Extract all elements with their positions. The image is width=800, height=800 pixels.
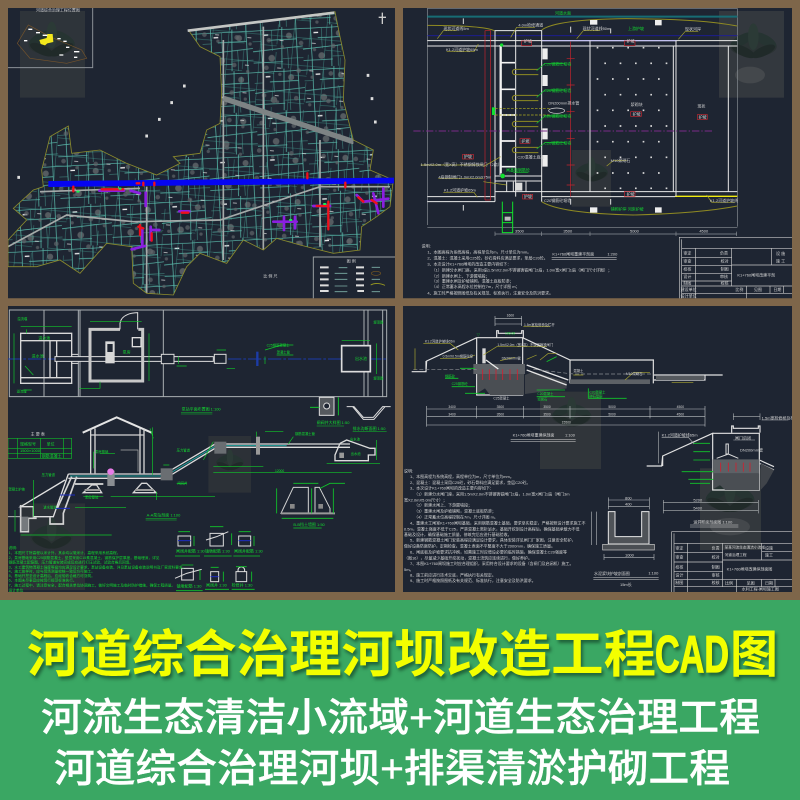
title block: 日期 <box>773 286 781 292</box>
title block: 施 工 <box>776 258 785 264</box>
panel: dam section: 浆砌石 <box>537 397 548 402</box>
green gate <box>492 107 495 115</box>
design notes: 8、施工前应进行技术交底，严格执行有关规定。 <box>410 571 496 577</box>
drawing frame <box>427 8 737 228</box>
panel: pump station section: 溢流堰 <box>17 389 27 394</box>
pump data table: 单位 <box>47 440 55 446</box>
plan annotations: 现状 <box>697 103 705 109</box>
panel: dam section: K1.2河道护坡线65m <box>425 339 455 344</box>
main section title: K1+760闸坝重建纵剖面 <box>513 432 554 438</box>
small details: 闸阀井配筋 1:30 <box>176 548 206 554</box>
plan annotations: 浆砌块 <box>631 101 643 107</box>
design notes: 7、本图K1+760闸坝施工时应合理组织，采用符合设计要求的设备（含闸门及启闭机）施工。 <box>410 560 573 566</box>
plan: pump house <box>90 313 143 381</box>
main section: dimension lines: 3500 <box>497 405 504 409</box>
watermark plant <box>719 11 784 98</box>
second section: 闸门启闭 <box>735 434 751 440</box>
inset location map <box>8 7 93 98</box>
design notes: 宽X2.0mX5.0m尺寸）； <box>404 496 447 502</box>
red label boxes <box>463 41 707 199</box>
retaining wall section <box>277 483 345 528</box>
plan: pier <box>254 352 261 366</box>
compass <box>379 13 386 24</box>
bank curves <box>427 19 737 215</box>
basin block dots <box>597 48 672 188</box>
plan annotations: 护坡 <box>524 193 532 199</box>
design notes: 6、闸底板及护坡要求抗冲刷，如需施工时应增设必要的临时措施，确保混凝土C20强度等 <box>410 548 567 554</box>
plan annotations: M10浆砌石 <box>611 157 630 163</box>
title block <box>672 532 792 592</box>
map: road and water network <box>0 0 400 300</box>
design notes: （3）重建水闸及护坡铺砌，混凝土底板防渗； <box>414 508 496 514</box>
design notes: （图16），尽量减少基础开挖扰动，混凝土浇筑应连续进行，做好养护。 <box>404 554 532 560</box>
title block: 日期 <box>765 579 773 585</box>
plan annotations: 河道水面 <box>555 9 571 15</box>
panel: pump station section: 进水池 <box>38 334 50 340</box>
main title: CAD <box>655 626 729 684</box>
design notes: 2、混凝土：混凝土采用C25砼，砂石骨料应满足要求，垫层C20砼。 <box>427 255 548 261</box>
green design notes: 钢筋混凝土配筋图，压力管道安装完成后应进行打压试验，试验合格后回填。 <box>9 559 133 564</box>
small details: 镇墩配筋 1:30 <box>205 548 231 554</box>
second section: 1.5m宽检修桥及栏杆 <box>762 414 798 420</box>
main section: dimension lines: 3500 <box>543 405 551 409</box>
title block: 设 施 <box>776 250 785 256</box>
second section <box>647 413 798 527</box>
section title: A-A泵站剖面 1:100 <box>147 512 181 518</box>
panel: dam section <box>403 306 798 592</box>
panel: sluice dam plan <box>403 8 792 299</box>
main section title <box>511 432 576 441</box>
panel: pump station section: 进水池 <box>32 352 44 358</box>
title block: 施工 <box>765 552 773 558</box>
main section: leaders <box>415 327 693 383</box>
plan annotations: DN200mm排水管 <box>548 99 579 105</box>
main section: dimension lines: 4500 <box>677 412 684 416</box>
panel: pump station section: 压力管道 <box>42 472 56 477</box>
outlet ladder <box>502 202 513 233</box>
design notes: 9、施工时严格按照图纸及有关规范、标准执行，注意安全及防洪要求。 <box>410 577 536 583</box>
panel: dam section: C25混凝土 <box>493 395 510 400</box>
plan annotations: 4扇钢制闸门1.0mX2.0mX75m <box>438 174 492 180</box>
legend: 图 例 <box>347 258 356 264</box>
panel: pump station section: 12000 <box>275 469 284 473</box>
title block: 见图 <box>754 286 762 292</box>
green design notes <box>9 545 186 592</box>
map: outline <box>8 12 393 295</box>
detail: trapezoid: 排水沟断面图 1:50 <box>353 425 386 431</box>
plan title: 泵站平面布置图 1:100 <box>182 406 221 412</box>
panel: dam section: C20混凝土 <box>537 391 554 396</box>
design notes: 4、重建水工闸室K1+760闸坝基础，采用钢筋混凝土基础，要求坚实稳定，严格按照设计要求施工不 <box>410 519 585 525</box>
design notes: （1）新建分水闸门座，采用1.5mX2.0m不锈钢铸铁闸门2扇，1.0m宽X闸门1扇（闸门3m <box>414 490 570 496</box>
plan annotations: 现状河道线50m <box>583 25 611 31</box>
section title <box>146 512 181 520</box>
second section: K1.2河道护坡线65m <box>662 432 698 438</box>
title block: 河道治理工程 <box>725 552 747 557</box>
design notes: 说明: <box>422 242 431 248</box>
plan: pipe line <box>55 357 213 361</box>
blue axis <box>8 357 387 360</box>
second section: DN200mm管 <box>740 447 763 453</box>
design notes: 5、新建钢筋混凝土闸门安装高程应满足设计要求，具体安装详见闸门厂家图，注意安全防护， <box>410 537 576 543</box>
map: northern road <box>188 13 334 31</box>
main section: dimension lines: 3500 <box>497 412 504 416</box>
dimension line: 3500 <box>515 229 525 234</box>
plan: valve wells <box>161 346 370 372</box>
plan annotations: 现状河道线5m <box>443 25 469 31</box>
design notes: （3）重建水闸及护坡铺砌，混凝土底板防渗； <box>432 277 514 283</box>
title block: 审核 <box>720 273 728 279</box>
main section: dimension lines: 1600 <box>507 314 514 318</box>
title block: 校对 <box>721 257 729 263</box>
basin walls <box>590 41 728 197</box>
map: scattered place labels <box>17 75 377 177</box>
design notes: （2）新建水闸上、下游翼墙段； <box>414 502 472 508</box>
main section: dimension lines: 5000 <box>608 405 616 409</box>
panel: dam section: 0.5mX0.5m钢筋砼梁 <box>443 353 474 358</box>
green design notes: 设计单位 <box>9 587 24 592</box>
green design notes: 7、施工过程中，请注意安全，配合相关单位协调施工，做好文明施工及临时防护措施，确保工程质量。 <box>9 583 175 588</box>
U-channel section: 800 <box>625 495 632 500</box>
detail: well <box>310 397 350 426</box>
panel: dam section: 碎石垫层 <box>589 393 603 398</box>
scale label: 比 例 尺 <box>263 272 278 278</box>
green design notes: 1、本图尺寸除高程以米计外，其余均以毫米计，高程采用系统高程。 <box>9 550 120 555</box>
map: blue main river <box>48 178 394 187</box>
title block: 审定 <box>683 250 691 256</box>
pump data table: 1500×1000 <box>20 448 41 453</box>
dimension line <box>494 230 737 236</box>
green design notes: 3、水工建筑物混凝土强度等级均应满足设计要求，泵站设备安装，详见泵站设备安装说明书及厂家资料要求。 <box>9 564 186 569</box>
design notes <box>422 242 612 296</box>
section: foundation <box>83 483 156 493</box>
small details <box>175 527 264 591</box>
title block: 审核 <box>712 572 720 578</box>
title block: 审定 <box>675 544 683 550</box>
watermark plants <box>20 436 251 590</box>
green design notes: 6、本图未尽事宜应按现行规范标准执行。 <box>9 578 77 583</box>
panel: pump station section: 堤顶路 <box>373 375 384 380</box>
title block: 设施 <box>765 544 773 550</box>
small details: 闸阀井 1:30 <box>206 582 228 588</box>
title block: 比例 <box>735 286 743 292</box>
green design notes: 5、基础开挖至设计高程后，应经验收合格方可浇筑。 <box>9 573 95 578</box>
design notes: （4）正常蓄水高程水位控制在7m，尺寸详图 m； <box>432 283 520 289</box>
panel: dam section: 1.5mX2.0m（宽X高）不锈钢铸铁闸门 <box>497 342 554 347</box>
panel: pump station section: 进水管道 <box>43 504 57 509</box>
section: outlet pool <box>335 440 375 461</box>
legend <box>313 257 395 298</box>
panel: pump station section: 出水池 <box>351 451 361 456</box>
plan annotations: K1.2河道护坡65m <box>444 186 477 192</box>
plan annotations: 1.5mX2.0m（宽X高）不锈钢铸铁闸门（2扇） <box>421 161 502 167</box>
main section: dimension lines: 4500 <box>677 405 684 409</box>
title block: 制图 <box>683 280 691 286</box>
design notes: （4）正常蓄水位高程控制在7m，尺寸详图 m。 <box>414 513 498 519</box>
subtitle line 1: 河流生态清洁小流域+河道生态治理工程 <box>41 697 760 740</box>
U-channel section: 15m长 <box>620 581 632 587</box>
title block: 负责 <box>712 544 720 550</box>
section: pressure pipeline <box>68 437 350 480</box>
plan annotations: 护坡 <box>524 38 532 44</box>
title block: K1+760闸坝改建平剖 <box>737 272 775 278</box>
plan annotations: K1.2河道护坡65m <box>446 46 479 52</box>
main section: dimension lines: 5000 <box>608 412 616 416</box>
design notes: 做好设备防腐防护，定期检查。混凝土表面不平整度不大于2000mm，确保施工质量。 <box>404 543 555 549</box>
banner <box>0 600 800 800</box>
drawing title <box>552 250 618 259</box>
title block: 设计 <box>675 572 683 578</box>
pump data table <box>8 431 72 458</box>
main section: dimension lines <box>427 314 705 427</box>
purple centerline <box>413 130 712 132</box>
title block: 负责 <box>720 250 728 256</box>
green design notes: 4、施工放样时，应与现场测量校核一致后方可施工。 <box>9 569 95 574</box>
title block: 水利工程-闸坝施工图 <box>742 586 779 592</box>
panel: pump station section: 堤顶路 <box>373 319 384 324</box>
plan annotations: 上游护坡 <box>628 25 644 31</box>
main section: dimension lines: 3400 <box>448 412 456 416</box>
design notes: 1、本图高程为系统高程，高程单位为m，尺寸单位为mm。 <box>410 473 514 479</box>
design notes <box>404 468 585 583</box>
green plan dimensions <box>14 322 377 390</box>
panel: pump station section: 出水池 <box>350 437 361 442</box>
green design notes: 2、泵房基础采用C25钢筋混凝土，垫层采用C15素混凝土，钢筋保护层厚度，基础埋深，详见 <box>9 555 160 560</box>
title block: 制图 <box>712 563 720 569</box>
pump data table: 规格型号 <box>20 440 36 446</box>
watermark plant <box>572 150 611 207</box>
yellow pipes <box>495 108 550 115</box>
plan annotations: C20钢筋砼堰墙 <box>544 197 571 203</box>
panel: pump station section: 溢流堰 <box>17 316 28 321</box>
retaining wall section: B-B挡土墙图 1:50 <box>293 521 326 527</box>
title block: 制图 <box>675 579 683 585</box>
design notes: 0.5m，混凝土强度不低于C25，严禁混凝土离析泌水，基础开挖到设计高程后，确保基础承载力不低 <box>404 525 580 531</box>
plan annotations: K1.2河道护坡线 <box>710 197 738 203</box>
panel: dam section: M10浆砌石 <box>626 371 643 376</box>
plan title <box>181 406 221 414</box>
U-channel section <box>592 495 659 587</box>
detail: well: 闸阀井大样图 1:50 <box>317 419 350 425</box>
plan annotations: C20钢筋砼堰墙 <box>544 60 571 66</box>
panel: pump station section: 泵房 <box>123 348 131 354</box>
plan annotations: 铺砌护岸 河床护坡 <box>611 206 644 212</box>
U-channel section: 1000 <box>625 552 635 557</box>
design notes: 2、混凝土：混凝土采用C25砼，砂石骨料应满足要求，垫层C20砼。 <box>410 479 530 485</box>
inset location map: 河道综合治理工程位置图 <box>36 7 80 13</box>
panel: pump station section: C25钢筋混凝土 <box>267 343 290 348</box>
section markers and white boxes <box>542 48 548 167</box>
panel: pump station section: 钢筋混凝土管 <box>295 431 316 436</box>
panel: pump station section: 泵房基础 <box>95 449 109 454</box>
title block: 校核 <box>721 280 729 286</box>
plan annotations: C20钢筋砼堰墙 <box>544 87 571 93</box>
drawing title: 1:200 <box>607 251 618 256</box>
second section: 5200 <box>693 497 703 502</box>
title block: 审查 <box>683 257 691 263</box>
title block: 见图 <box>747 579 755 585</box>
sluice structure <box>495 31 542 202</box>
section: pump house roof <box>83 417 152 473</box>
design notes: 1、本图高程为系统高程，高程单位为m，尺寸单位为mm。 <box>427 249 531 255</box>
section: inlet pool <box>8 474 77 532</box>
teal channel <box>427 16 738 18</box>
small details: 闸阀井配筋 1:30 <box>234 548 264 554</box>
dimension line: 5000 <box>630 229 640 234</box>
plan annotations: 护坡 <box>521 137 529 143</box>
panel: pump station section <box>8 306 395 592</box>
title block: 校对 <box>712 554 720 560</box>
plan: inlet chamber <box>21 333 78 383</box>
second section: 5400 <box>693 505 703 510</box>
main section title: 1:100 <box>565 433 576 438</box>
title block: 校核 <box>675 563 683 569</box>
main title: 河道综合治理河坝改造工程 <box>27 626 656 683</box>
drawing title: K1+760闸坝重建平剖面 <box>552 250 594 256</box>
title block: K1+760闸坝改建纵剖面图 <box>727 566 772 572</box>
panel: river basin map <box>0 0 400 300</box>
plan frame <box>9 310 387 397</box>
watermark plants <box>540 392 761 550</box>
plan annotations: C20钢筋砼堰墙 <box>544 113 571 119</box>
main section: dimension lines: 3500 <box>543 412 551 416</box>
main section: dimension lines: 3400 <box>448 405 456 409</box>
title block: 审查 <box>675 554 683 560</box>
plan annotations: 护坡 <box>627 38 635 44</box>
leader lines <box>421 27 735 202</box>
panel: dam section: 混凝土 <box>573 368 584 373</box>
title block: 校核 <box>683 265 691 271</box>
green design notes: 说明: <box>9 545 17 550</box>
plan annotations <box>421 9 738 212</box>
panel: dam section: C20混凝土 <box>589 389 606 394</box>
design notes: 基础及设计，确保基础施工质量，修筑完后应进行基础验收。 <box>404 531 512 537</box>
panel: dam section: C25钢筋砼 <box>452 381 468 386</box>
subtitle line 2: 河道综合治理河坝+排渠清淤护砌工程 <box>54 748 730 791</box>
red dimensions <box>485 31 571 200</box>
section: pump <box>75 468 115 486</box>
panel: pump station section: 出水池 <box>355 355 367 361</box>
panel: pump station section: 泵房基础 <box>85 494 99 499</box>
design notes: 说明: <box>404 468 413 474</box>
plan annotations: C20钢筋砼堰墙 <box>544 140 571 146</box>
title block: 校核 <box>712 579 720 585</box>
blue axis <box>427 35 738 36</box>
title block: 某某河流生态清洁小流域 <box>725 545 765 550</box>
title block: 设计 <box>683 273 691 279</box>
plan annotations: 4.0m检修通道 <box>518 22 543 28</box>
title block: 建设单位 <box>681 286 697 292</box>
panel: dam section: 106.00 <box>505 332 515 336</box>
panel: pump station section: 混凝土管 <box>277 349 291 354</box>
main section: dimension lines: 15500 <box>562 421 571 425</box>
road lines <box>427 41 737 202</box>
pump data table: 主 要 表 <box>31 431 45 437</box>
title block: 制图 <box>721 265 729 271</box>
small details: 镇墩配筋 1:30 <box>177 582 202 588</box>
plan annotations: 护坡 <box>633 110 641 116</box>
U-channel section: 水泥浆块护坡剖面图 <box>594 570 630 576</box>
yellow slots <box>512 69 538 153</box>
design notes: 3、本次设计K1+760闸坝的改造主要内容如下： <box>427 261 511 267</box>
main section: embankment <box>412 331 723 395</box>
plan annotations: C20混凝土底板 <box>517 154 545 160</box>
design notes: （1）新建分水闸门座，采用3扇1.5mX2.0m不锈钢铸铁闸门2扇，1.0m宽X闸门1扇（闸门尺寸详图）； <box>432 267 612 273</box>
detail: trapezoid <box>347 407 391 432</box>
U-channel section: 1:100 <box>648 571 659 576</box>
title block: 设计单位 <box>681 293 697 299</box>
design notes: （2）新建水闸上、下游翼墙段； <box>432 272 490 278</box>
bridge and road section ticks <box>463 18 611 211</box>
plan annotations: 护坡 <box>464 153 472 159</box>
dimension line: 4500 <box>699 229 709 234</box>
main title: 图 <box>730 626 778 683</box>
map: purple and red works <box>73 173 388 249</box>
panel: pump station section: 闸阀井 <box>177 480 188 485</box>
design notes: 4、施工时严格按照图纸及有关规范、标准执行，注意安全及防洪要求。 <box>427 290 553 296</box>
pump data table: 钢筋混凝土 <box>42 452 62 458</box>
U-channel section: 400 <box>625 502 632 507</box>
panel: dam section: ▽ <box>477 333 481 337</box>
plan annotations: 护坡 <box>627 190 635 196</box>
panel: pump station section: 混凝土护坡 <box>8 487 26 492</box>
design notes: 5m。 <box>404 567 414 572</box>
plan annotations: 现状河岸 <box>685 25 701 31</box>
title block <box>679 237 792 299</box>
dimension line: 3500 <box>563 229 573 234</box>
panel: dam section: DN200mm管 <box>502 355 522 360</box>
small details: 检修井 1:30 <box>232 582 253 588</box>
panel: dam section: 1.5m宽检修桥及栏杆 <box>524 322 555 327</box>
plan annotations: 护坡 <box>699 113 707 119</box>
design notes: 3、本次设计K1+760闸坝的改造主要内容如下： <box>410 485 494 491</box>
panel: pump station section: 压力管道 <box>177 448 191 453</box>
green section dimensions <box>15 427 380 535</box>
plan annotations: 闸基础钢筋砼 <box>506 167 530 173</box>
second section: 涵洞断面剖面图 1:100 <box>693 518 733 524</box>
panel: dam section: 钢筋砼 <box>445 374 456 379</box>
title block: 比例 <box>725 579 733 585</box>
